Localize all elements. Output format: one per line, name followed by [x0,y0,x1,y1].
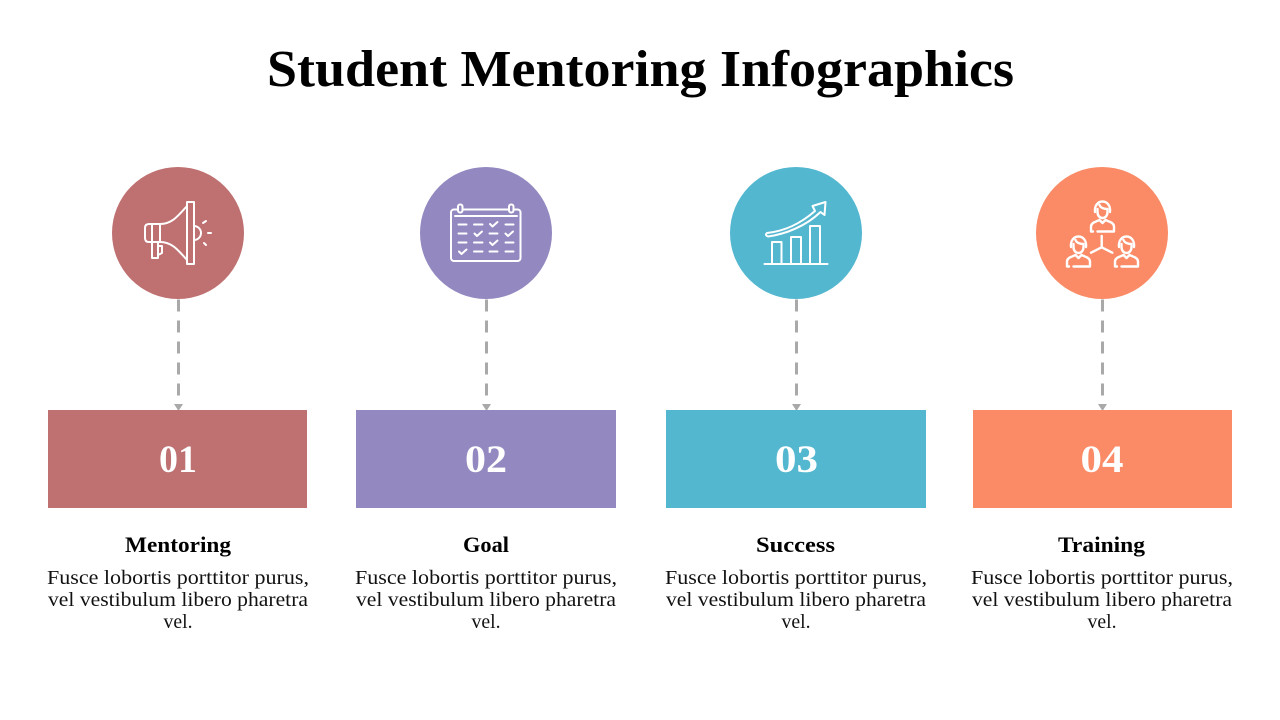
description: goal: vel. [472,611,500,633]
panel: training [971,167,1233,633]
description: goal: vel vestibulum libero pharetra [356,589,616,611]
icon circle: calendar [420,167,552,299]
arrow: dashed connector [792,300,801,411]
arrow: dashed connector [1098,300,1107,411]
title: Student Mentoring Infographics [267,41,1014,98]
number box 02 [356,410,616,508]
heading: Training: Training [1058,532,1145,557]
number box 01: 01 [159,438,197,481]
description: training [971,567,1233,633]
panel: mentoring [47,167,309,633]
description: goal [355,567,617,633]
description: success: vel vestibulum libero pharetra [666,589,926,611]
description: success: Fusce lobortis porttitor purus, [665,567,927,589]
description: mentoring: vel. [164,611,192,633]
description: success: vel. [782,611,810,633]
description: mentoring: Fusce lobortis porttitor purus, [47,567,309,589]
number box 04 [973,410,1232,508]
heading: Mentoring: Mentoring [125,532,231,557]
description: mentoring: vel vestibulum libero pharetra [48,589,308,611]
panel: goal [355,167,617,633]
description: training: Fusce lobortis porttitor purus, [971,567,1233,589]
description: goal: Fusce lobortis porttitor purus, [355,567,617,589]
description: mentoring [47,567,309,633]
description: training: vel. [1088,611,1116,633]
heading: Goal: Goal [463,532,509,557]
description: success [665,567,927,633]
icon circle: megaphone [112,167,244,299]
number box 03 [666,410,926,508]
number box 01 [48,410,307,508]
number box 02: 02 [465,438,507,481]
description: training: vel vestibulum libero pharetra [972,589,1232,611]
arrow: dashed connector [174,300,183,411]
icon circle: people network [1036,167,1168,299]
panel: success [665,167,927,633]
icon circle: growth chart [730,167,862,299]
arrow: dashed connector [482,300,491,411]
number box 03: 03 [775,438,818,481]
number box 04: 04 [1080,438,1124,481]
heading: Success: Success [756,532,835,557]
